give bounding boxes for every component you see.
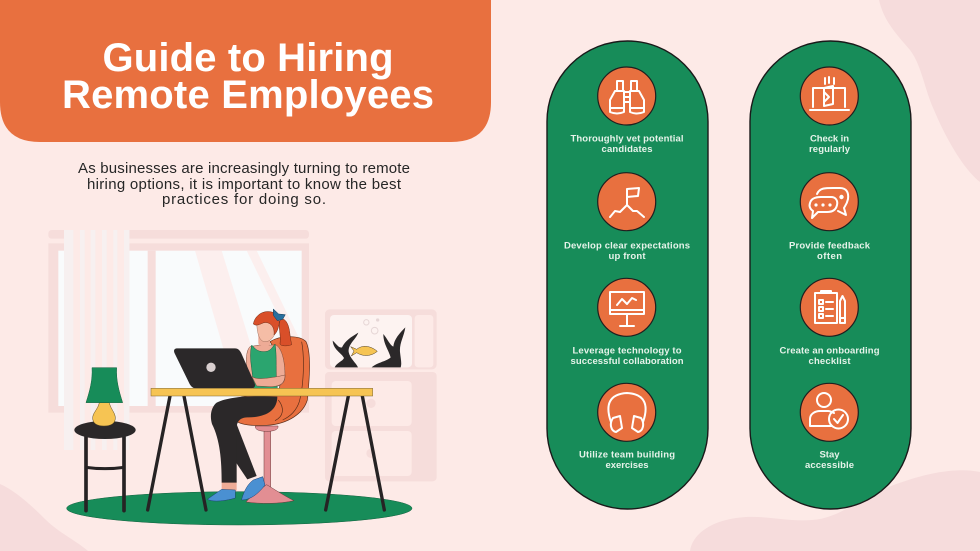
laptop	[174, 348, 255, 388]
icon: headphones	[598, 383, 656, 441]
label: checklist	[808, 356, 851, 367]
label: Develop clear expectations	[564, 240, 690, 252]
label	[805, 450, 854, 471]
label: successful collaboration	[570, 356, 684, 367]
label: Utilize team building	[579, 450, 675, 460]
icon: laptop with envelope	[800, 67, 858, 125]
label: candidates	[602, 144, 652, 155]
label	[570, 134, 684, 155]
label	[579, 450, 675, 471]
label: Check in	[810, 134, 849, 144]
intro text	[78, 160, 410, 208]
label	[809, 134, 851, 155]
item: check in regularly	[800, 67, 858, 155]
background blob: bottom right	[690, 470, 980, 551]
label: Thoroughly vet potential	[570, 134, 684, 144]
label: often	[817, 251, 842, 262]
icon: binoculars	[598, 67, 656, 125]
item: provide feedback	[789, 173, 871, 262]
window	[48, 230, 309, 413]
cabinet with aquarium	[325, 309, 437, 481]
title banner	[0, 0, 491, 142]
item: leverage technology	[570, 278, 684, 367]
background blob: top right	[879, 0, 980, 182]
icon: flag on mountain	[598, 173, 656, 231]
label: exercises	[606, 460, 648, 471]
background blob: bottom left	[0, 484, 88, 551]
label	[564, 240, 690, 262]
item: stay accessible	[800, 383, 858, 471]
title: Guide to Hiring	[102, 36, 394, 80]
icon: clipboard and pencil	[800, 278, 858, 336]
desk	[148, 388, 384, 510]
illustration: woman working at a desk	[48, 230, 437, 525]
icon: person with check mark	[800, 383, 858, 441]
curtain	[64, 230, 129, 450]
label	[789, 240, 871, 262]
icon: monitor with chart	[598, 278, 656, 336]
rug	[67, 492, 412, 525]
panel: right column	[750, 41, 911, 509]
title	[62, 36, 434, 117]
chair	[223, 337, 310, 503]
label: Stay	[820, 450, 840, 460]
label: Leverage technology to	[572, 346, 682, 356]
label: accessible	[805, 460, 854, 471]
icon: speech bubbles	[800, 173, 858, 231]
intro text: practices for doing so.	[162, 191, 326, 208]
item: develop clear expectations	[564, 173, 690, 262]
label	[780, 346, 880, 367]
label	[570, 346, 684, 367]
item: team building	[579, 383, 675, 471]
item: thoroughly vet potential candidates	[570, 67, 684, 155]
intro text: As businesses are increasingly turning to remote	[78, 160, 410, 177]
label: regularly	[809, 144, 851, 155]
title: Remote Employees	[62, 73, 434, 117]
side table with lamp	[74, 368, 136, 511]
intro text: hiring options, it is important to know the best	[87, 176, 402, 193]
label: Provide feedback	[789, 240, 871, 252]
panel: left column	[547, 41, 708, 509]
item: onboarding checklist	[780, 278, 880, 367]
woman	[207, 309, 292, 501]
label: Create an onboarding	[780, 346, 880, 356]
label: up front	[608, 251, 646, 262]
